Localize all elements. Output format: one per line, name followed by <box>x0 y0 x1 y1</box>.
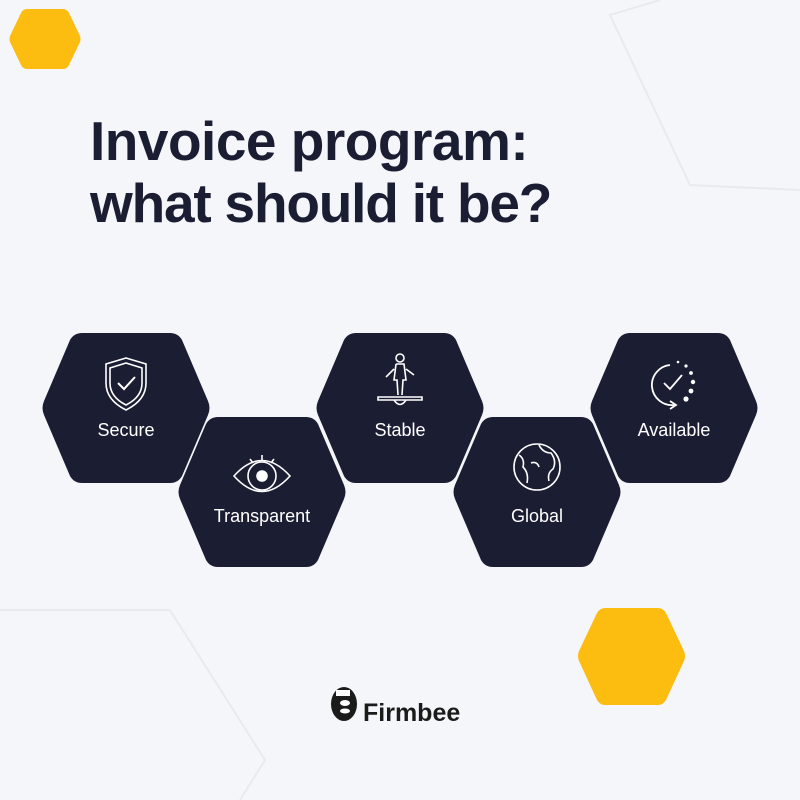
hexagon: Transparent: Transparent <box>214 506 310 526</box>
icon: bee <box>331 687 357 721</box>
icon: shield <box>106 358 146 410</box>
icon: yellow hexagon bottom-right <box>578 608 685 705</box>
title: Invoice program: <box>90 110 528 172</box>
title: what should it be? <box>89 172 551 234</box>
icon: balance board <box>378 354 422 404</box>
icon: clock check <box>652 361 695 409</box>
hexagon: Stable <box>316 333 484 483</box>
hexagon: Available: Available <box>638 420 710 440</box>
hexagon: Secure: Secure <box>97 420 155 440</box>
hexagon: Transparent <box>178 417 346 567</box>
hexagon: Global <box>454 417 620 567</box>
hexagon: Stable: Stable <box>374 420 426 440</box>
logo: Firmbee <box>331 687 460 727</box>
icon: eye <box>234 455 290 492</box>
hexagon: Secure <box>42 333 210 483</box>
icon: yellow hexagon top-left <box>10 9 80 69</box>
icon: globe <box>514 444 560 490</box>
title <box>89 110 551 234</box>
hexagon: Available <box>590 333 758 483</box>
logo: Firmbee: Firmbee <box>363 699 460 727</box>
hexagon: Global: Global <box>511 506 563 526</box>
